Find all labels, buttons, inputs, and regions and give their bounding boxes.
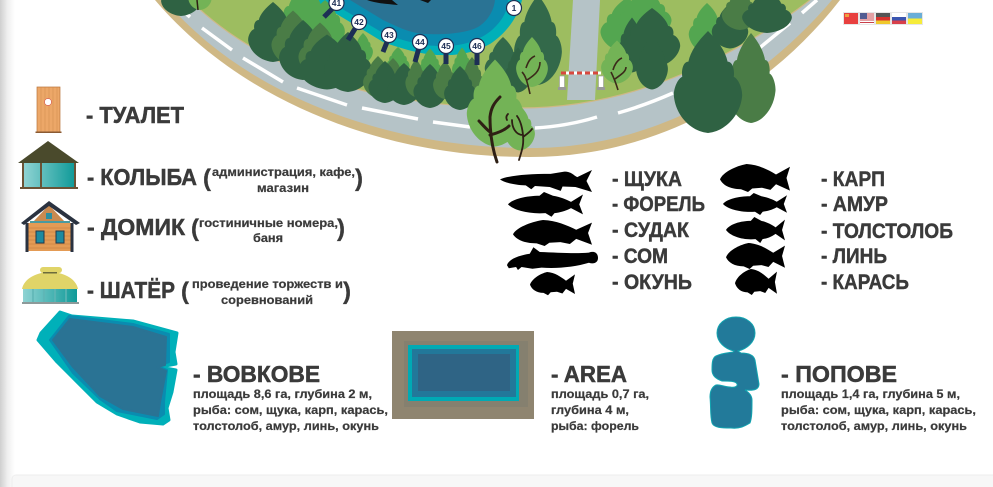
- pond details: площадь 1,4 га, глубина 5 м,: [781, 389, 960, 401]
- legend: toilet: [36, 87, 184, 133]
- pond name: - ВОВКОВЕ: [193, 361, 320, 387]
- road outer verge: [155, 0, 840, 157]
- pond name: - ПОПОВЕ: [781, 361, 897, 387]
- note: соревнований: [221, 295, 313, 307]
- flag: Ukraine: [908, 13, 922, 24]
- pond shape: [392, 331, 534, 419]
- note: ): [337, 215, 345, 242]
- pond: Popove: [710, 317, 976, 433]
- pond: Vovkove: [38, 312, 388, 433]
- fish labels left column: - ЩУКА: [612, 167, 682, 191]
- fish labels right column: - КАРП: [821, 167, 885, 191]
- legend: koliba: [18, 141, 363, 195]
- note: магазин: [257, 183, 309, 195]
- note: гостиничные номера,: [199, 218, 338, 230]
- numbered markers: 44: [415, 37, 425, 47]
- pond details: глубина 4 м,: [551, 405, 629, 417]
- label: - ШАТЁР: [87, 277, 175, 303]
- pond details: рыба: сом, щука, карп, карась,: [781, 405, 976, 417]
- fish labels left column: - ФОРЕЛЬ: [612, 192, 705, 216]
- label: - ТУАЛЕТ: [86, 102, 184, 128]
- side road: [567, 0, 600, 100]
- pond: Area: [392, 331, 649, 433]
- label: - КОЛЫБА: [87, 164, 197, 190]
- note: ): [355, 165, 363, 192]
- fish labels right column: - ЛИНЬ: [821, 244, 887, 268]
- numbered markers: 42: [354, 17, 364, 27]
- road markings: [170, 0, 817, 128]
- grass: [190, 0, 810, 108]
- pond details: рыба: сом, щука, карп, карась,: [193, 405, 388, 417]
- icon: cabin: [21, 201, 80, 252]
- pond name: - AREA: [551, 361, 627, 387]
- pond details: [551, 389, 649, 433]
- flag: USA: [860, 13, 874, 24]
- fish labels right column: [821, 167, 953, 294]
- large trees: [161, 0, 776, 162]
- fish silhouettes left column: [500, 170, 598, 295]
- language flags: [843, 12, 923, 25]
- lake: [313, 0, 522, 55]
- label: - ДОМИК: [87, 214, 186, 240]
- note: (: [181, 278, 189, 305]
- legend: cabin: [21, 201, 345, 252]
- pond shape: [38, 312, 177, 424]
- bottom panel: [12, 475, 993, 487]
- note: (: [191, 215, 199, 242]
- flag: Russia: [892, 13, 906, 24]
- pond details: толстолоб, амур, линь, окунь: [781, 421, 967, 433]
- pond details: [193, 389, 388, 433]
- forest left: [248, 0, 484, 110]
- note: [203, 165, 363, 195]
- pond details: площадь 8,6 га, глубина 2 м,: [193, 389, 372, 401]
- numbered markers: 45: [441, 41, 451, 51]
- pond details: толстолоб, амур, линь, окунь: [193, 421, 379, 433]
- trees right of the side road: [600, 0, 792, 90]
- note: [181, 278, 351, 307]
- numbered markers: 1: [512, 3, 517, 13]
- flag: China: [844, 13, 858, 24]
- note: баня: [253, 233, 283, 245]
- numbered markers: 46: [472, 41, 482, 51]
- note: проведение торжеств и: [192, 279, 343, 291]
- pond shape: [710, 317, 759, 428]
- numbered markers: 43: [384, 30, 394, 40]
- fish labels left column: - ОКУНЬ: [612, 270, 692, 294]
- fish silhouettes right column: [720, 164, 790, 295]
- numbered markers: [324, 0, 522, 65]
- fish labels right column: - КАРАСЬ: [821, 270, 909, 294]
- map: park fragment: [155, 0, 840, 162]
- legend: tent: [22, 267, 351, 307]
- pond details: рыба: форель: [551, 421, 639, 433]
- note: администрация, кафе,: [212, 167, 355, 179]
- pond details: [781, 389, 976, 433]
- barrier: [558, 73, 605, 90]
- fish labels left column: - СОМ: [612, 244, 668, 268]
- icon: tent: [22, 267, 79, 304]
- fish labels left column: - СУДАК: [612, 218, 690, 242]
- note: ): [343, 278, 351, 305]
- icon: koliba: [18, 141, 79, 189]
- trees right of the lake: [485, 0, 562, 94]
- fish labels right column: - ТОЛСТОЛОБ: [821, 219, 953, 243]
- note: [191, 215, 345, 245]
- fish labels left column: [612, 167, 705, 294]
- fish labels right column: - АМУР: [821, 192, 888, 216]
- flag: Germany: [876, 13, 890, 24]
- note: (: [203, 165, 211, 192]
- icon: toilet: [36, 87, 62, 133]
- pond details: площадь 0,7 га,: [551, 389, 649, 401]
- ring road: [165, 0, 832, 148]
